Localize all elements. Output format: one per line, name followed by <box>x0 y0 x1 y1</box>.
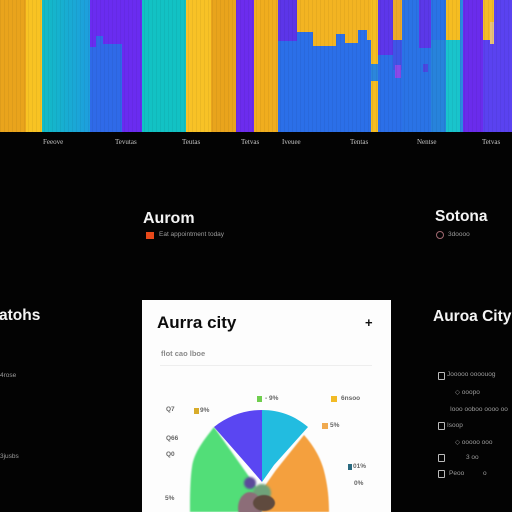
pie labels: - 9% <box>265 395 278 402</box>
pie labels: 5% <box>330 422 339 429</box>
right list: ◇ ooopo <box>455 389 480 396</box>
axis labels: Iveuee <box>282 138 301 146</box>
list item 3 <box>438 454 445 462</box>
pie labels: Q0 <box>166 451 175 458</box>
list item 1 <box>438 372 445 380</box>
heading: Aurom: Aurom <box>143 210 195 227</box>
heading: Sotona <box>435 208 488 239</box>
heading: left cut-off: atohs <box>0 307 40 324</box>
heading: Sotona: Sotona <box>435 208 488 225</box>
list item 2 <box>438 422 445 430</box>
legend: orange key: Eat appointment today <box>159 231 224 238</box>
axis labels: Feeove <box>43 138 63 146</box>
legend: sotona key: 3doooo <box>448 231 470 238</box>
right list: Jooooo oooouog <box>447 371 495 378</box>
pie labels: 01% <box>353 463 366 470</box>
axis labels: Nentse <box>417 138 436 146</box>
heading: Aurom <box>143 210 224 239</box>
axis labels: Tentas <box>350 138 368 146</box>
left text items: 4rose <box>0 372 16 379</box>
axis labels: Tetvas <box>482 138 500 146</box>
pie labels: 0% <box>354 480 363 487</box>
plus icon: + <box>365 315 373 330</box>
legend: sotona key <box>436 231 470 239</box>
axis labels <box>43 138 500 146</box>
stacked column chart <box>0 0 512 132</box>
right list: 3 oo <box>466 454 479 461</box>
pie labels: 5% <box>165 495 174 502</box>
pie labels <box>165 395 366 502</box>
divider <box>160 365 372 366</box>
right list: Iooo ooboo oooo oo <box>450 406 508 413</box>
heading: Auroa City: Auroa City <box>433 308 511 325</box>
panel: Aurra city card <box>142 300 391 512</box>
axis labels: Tetvas <box>241 138 259 146</box>
right list: ◇ ooooo ooo <box>455 439 493 446</box>
pie labels: 6nsoo <box>341 395 360 402</box>
pie labels: 9% <box>200 407 209 414</box>
axis labels: Teutas <box>182 138 200 146</box>
right list: Peoo <box>449 470 464 477</box>
list item 4 <box>438 470 445 478</box>
right list: Isoop <box>447 422 463 429</box>
left text items <box>0 372 19 460</box>
left text items: 3jusbs <box>0 453 19 460</box>
card title: Aurra city <box>157 313 236 332</box>
axis labels: Tevutas <box>115 138 137 146</box>
right list <box>438 371 508 478</box>
pie labels: Q7 <box>166 406 175 413</box>
card subtitle: flot cao lboe <box>161 349 205 358</box>
pie chart <box>189 410 330 512</box>
pie labels: Q66 <box>166 435 178 442</box>
right list: o <box>483 470 487 477</box>
